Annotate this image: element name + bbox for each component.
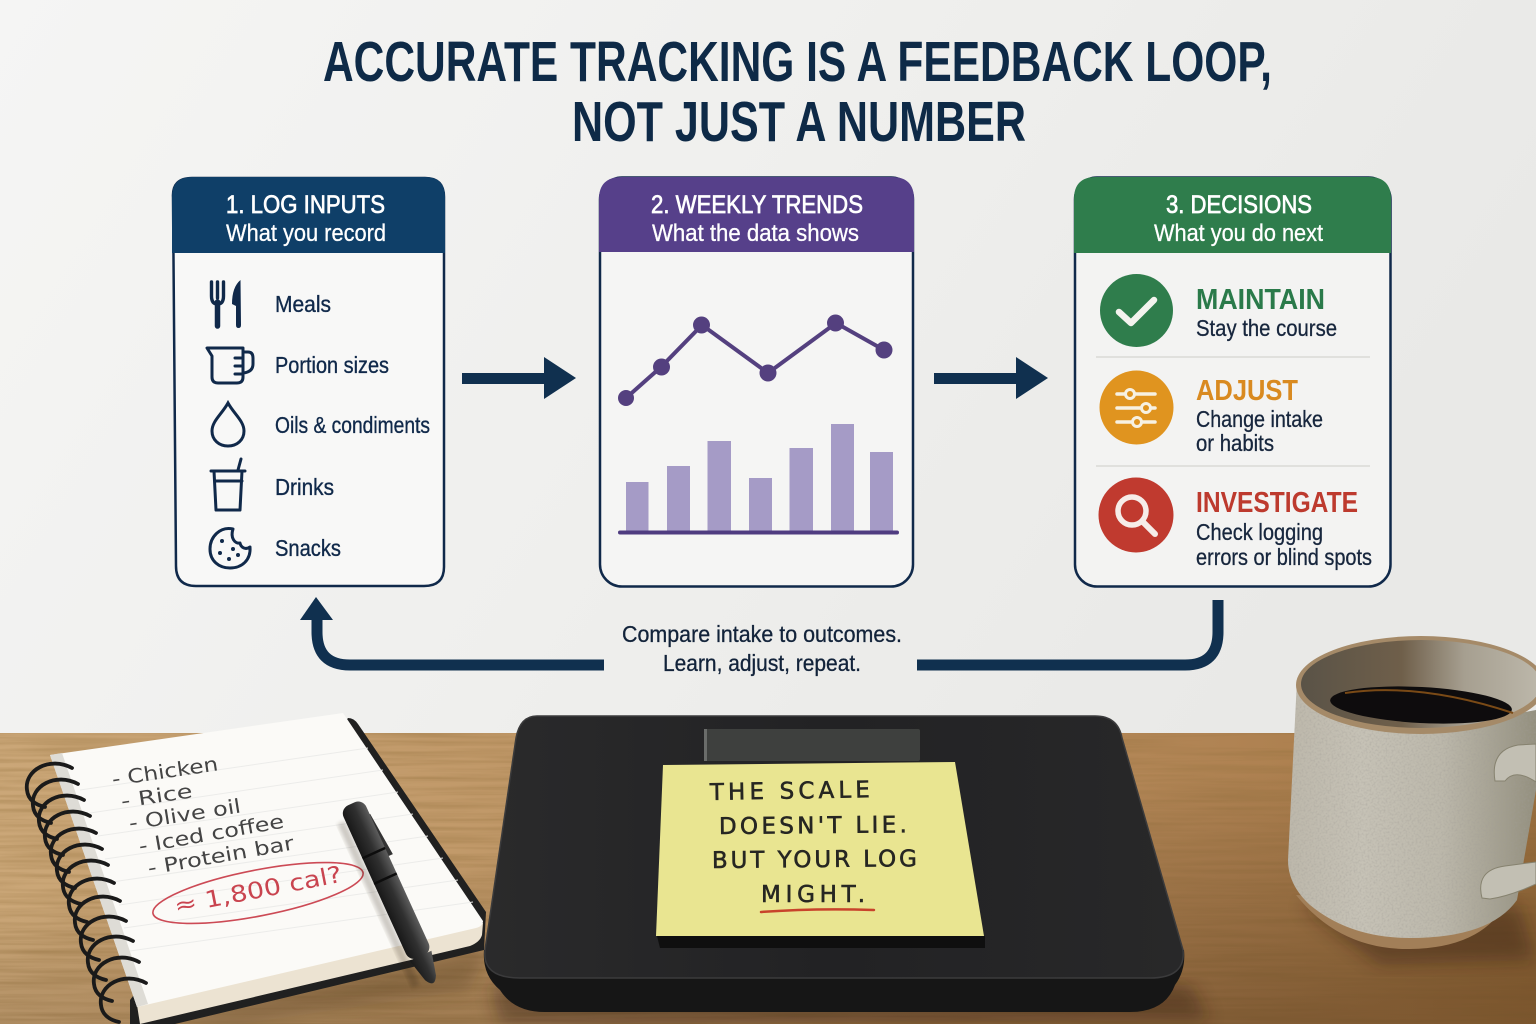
- panel: decisions: [1074, 177, 1391, 586]
- mug foot: [1296, 895, 1505, 949]
- bathroom scale: [484, 716, 1210, 1024]
- icon: oil drop: [212, 403, 244, 446]
- sticky note handwriting: THE SCALE: [709, 777, 870, 806]
- icon: fork and knife: [212, 280, 241, 328]
- panel header: log inputs: What you record: [226, 220, 386, 247]
- panel: log inputs: [172, 177, 445, 586]
- loop caption: Compare intake to outcomes.: [622, 621, 902, 647]
- arrow: feedback loop: [300, 597, 1218, 665]
- decision: investigate: [1098, 478, 1372, 570]
- notebook ruled lines: [80, 748, 473, 951]
- panel header: weekly trends: What the data shows: [652, 220, 859, 247]
- list: input labels: Portion sizes: [275, 352, 389, 378]
- decision: maintain: MAINTAIN: [1196, 284, 1325, 316]
- notebook page edge: [137, 923, 483, 1024]
- notebook binding strip: [50, 753, 148, 1007]
- list: input labels: [275, 291, 430, 561]
- icon: sliders: [1100, 370, 1174, 444]
- icon: drink cup: [211, 459, 245, 510]
- coffee mug: [1288, 636, 1536, 965]
- notebook handwritten list: - Chicken: [110, 752, 220, 791]
- decision: investigate: Check logging: [1196, 519, 1323, 545]
- panel header: weekly trends: [599, 177, 914, 252]
- notebook cover: [130, 718, 486, 1024]
- bar chart: [618, 424, 899, 534]
- background wall: [0, 0, 1536, 734]
- loop caption: [622, 621, 902, 676]
- notebook handwritten list: - Olive oil: [127, 795, 242, 835]
- panel header: log inputs: [172, 177, 445, 253]
- scale display: [704, 729, 920, 761]
- list: input labels: Oils & condiments: [275, 412, 430, 438]
- decision: adjust: or habits: [1196, 430, 1274, 456]
- panel header: log inputs: 1. LOG INPUTS: [226, 191, 385, 219]
- list: input labels: Meals: [275, 291, 331, 317]
- notebook handwritten list: [110, 752, 297, 880]
- red underline: [761, 909, 874, 912]
- notebook red calorie note: [149, 850, 367, 936]
- scale top surface: [485, 716, 1183, 978]
- icon: magnifier: [1098, 478, 1174, 552]
- list: input labels: Drinks: [275, 474, 334, 500]
- notebook handwritten list: - Iced coffee: [137, 810, 286, 858]
- scale body: [484, 950, 1184, 1012]
- decision: maintain: Stay the course: [1196, 315, 1337, 341]
- sticky note handwriting: BUT YOUR LOG: [712, 846, 917, 874]
- notebook page: [50, 713, 483, 1007]
- decision: adjust: Change intake: [1196, 406, 1323, 432]
- decision: adjust: [1100, 370, 1323, 456]
- sticky note handwriting: [709, 777, 917, 908]
- mug shadow: [1300, 905, 1536, 965]
- decision: investigate: INVESTIGATE: [1196, 487, 1358, 519]
- panel header: decisions: 3. DECISIONS: [1166, 191, 1312, 219]
- decision: investigate: errors or blind spots: [1196, 544, 1372, 570]
- panel header: weekly trends: 2. WEEKLY TRENDS: [651, 191, 863, 219]
- wooden desk: [0, 733, 1536, 1024]
- decision: maintain: [1100, 274, 1337, 347]
- mug rim and interior: [1296, 636, 1536, 734]
- notebook: [27, 713, 490, 1024]
- panel header: decisions: What you do next: [1154, 220, 1323, 247]
- panel: weekly trends: [599, 177, 914, 586]
- arrow: inputs to trends: [462, 357, 576, 399]
- sticky note handwriting: DOESN'T LIE.: [719, 812, 907, 840]
- icon: check mark: [1100, 274, 1173, 347]
- sticky note: [656, 762, 985, 948]
- icon: measuring cup: [207, 348, 253, 383]
- panel header: decisions: [1074, 177, 1391, 253]
- decision: adjust: ADJUST: [1196, 375, 1298, 407]
- notebook shadow: [135, 945, 490, 1024]
- notebook handwritten list: - Rice: [119, 780, 194, 813]
- notebook handwritten list: - Protein bar: [146, 831, 297, 880]
- mug handle: [1481, 744, 1536, 899]
- arrow: trends to decisions: [934, 357, 1048, 399]
- notebook red calorie note: ≈ 1,800 cal?: [172, 862, 344, 920]
- loop caption: Learn, adjust, repeat.: [663, 650, 861, 676]
- list: input labels: Snacks: [275, 535, 341, 561]
- mug body: [1288, 680, 1536, 938]
- scale shadow: [490, 985, 1210, 1024]
- title: [323, 30, 1272, 154]
- pen: [332, 797, 448, 992]
- icon: cookie: [210, 529, 250, 568]
- line chart: [618, 314, 892, 406]
- notebook spiral binding: [27, 764, 146, 1022]
- sticky note handwriting: MIGHT.: [761, 882, 865, 908]
- title: NOT JUST A NUMBER: [572, 90, 1026, 154]
